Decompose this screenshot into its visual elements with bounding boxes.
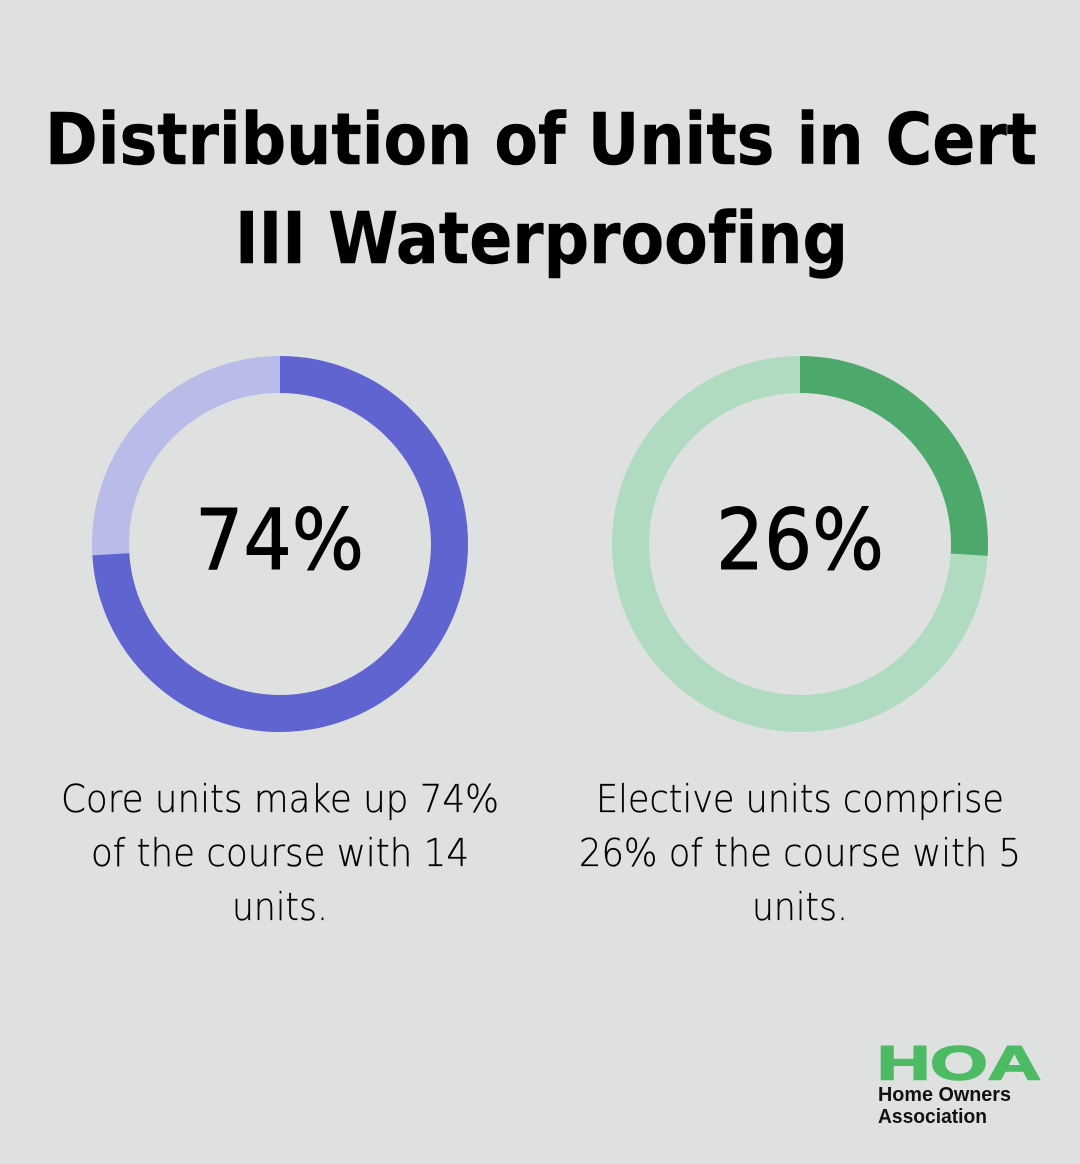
panel: core units (61, 374, 499, 930)
logo: HOA Home Owners Association (877, 1038, 1041, 1128)
text: core description: units. (232, 885, 328, 930)
stat: 74%: 74% (195, 491, 364, 589)
text: core description: Core units make up 74% (61, 777, 499, 822)
logo: HOA Home Owners Association: Association (878, 1106, 987, 1128)
text: elective description (579, 777, 1021, 930)
text: elective description: 26% of the course with 5 (579, 831, 1021, 876)
title: III Waterproofing (235, 197, 848, 280)
title (45, 98, 1037, 280)
donut chart: 26% elective (630, 374, 970, 714)
stat: 26%: 26% (716, 491, 884, 589)
text: elective description: units. (752, 885, 848, 930)
text: core description: of the course with 14 (91, 831, 469, 876)
logo: HOA Home Owners Association: HOA (877, 1038, 1041, 1090)
logo: HOA Home Owners Association: Home Owners (878, 1084, 1011, 1106)
text: core description (61, 777, 499, 930)
donut chart: 74% core (110, 374, 450, 714)
panel: elective units (579, 374, 1021, 930)
text: elective description: Elective units comprise (596, 777, 1004, 822)
